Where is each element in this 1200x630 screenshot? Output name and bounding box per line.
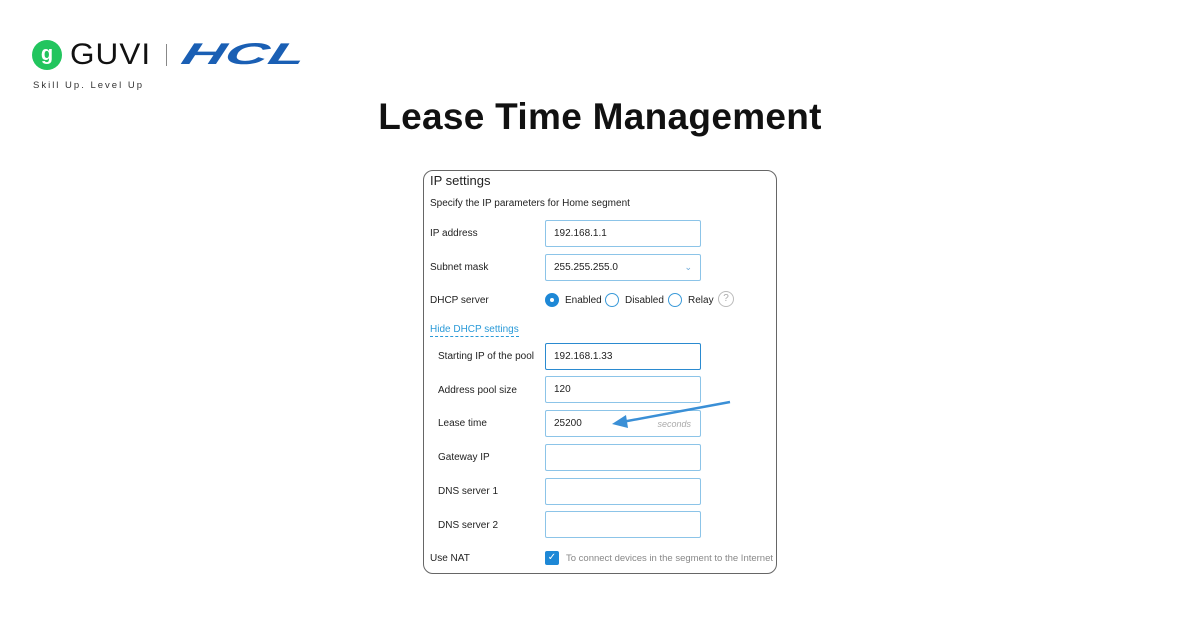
row: Gateway IP: Gateway IP [438, 452, 490, 463]
icon: guvi circle [32, 40, 62, 70]
text: 25200 [554, 418, 582, 429]
HCL wordmark: HCL [178, 38, 310, 71]
row: Address pool size: Address pool size [438, 385, 517, 396]
heading: IP settings: IP settings [430, 173, 490, 188]
text: Relay [688, 295, 714, 306]
row: Use NAT checkbox [430, 551, 773, 565]
row: Starting IP: Starting IP of the pool [438, 351, 534, 362]
icon: guvi circle: g [41, 43, 53, 65]
row: Lease time: Lease time [438, 418, 487, 429]
link: Hide DHCP settings: Hide DHCP settings [430, 324, 519, 335]
row: DNS server 1: DNS server 1 [438, 486, 498, 497]
title: Lease Time Management [378, 96, 822, 137]
tagline: Skill Up. Level Up [33, 80, 144, 91]
text: Enabled [565, 295, 602, 306]
row: DHCP server radios: DHCP server [430, 295, 489, 306]
GUVI wordmark: GUVI [70, 38, 151, 71]
text: description: Specify the IP parameters for Home segment [430, 198, 630, 209]
row: Use NAT checkbox: Use NAT [430, 553, 470, 564]
icon: help: ? [723, 293, 729, 304]
arrow: pointing to lease time [612, 400, 730, 428]
text: Disabled [625, 295, 664, 306]
text: 120 [554, 384, 571, 395]
row: Use NAT checkbox: To connect devices in the segment to the Internet [566, 553, 773, 564]
panel: IP settings card [423, 170, 777, 574]
text: seconds [657, 419, 691, 429]
row: DNS server 2: DNS server 2 [438, 520, 498, 531]
text: 192.168.1.33 [554, 351, 612, 362]
row: Subnet mask: Subnet mask [430, 262, 488, 273]
logo: GUVI HCL [32, 38, 310, 91]
text: 255.255.255.0 [554, 262, 618, 273]
row: IP address: IP address [430, 228, 478, 239]
row: Use NAT checkbox: ✓ [548, 552, 556, 563]
text: 192.168.1.1 [554, 228, 607, 239]
icon: help [718, 291, 734, 307]
text: ⌄ [684, 262, 692, 272]
